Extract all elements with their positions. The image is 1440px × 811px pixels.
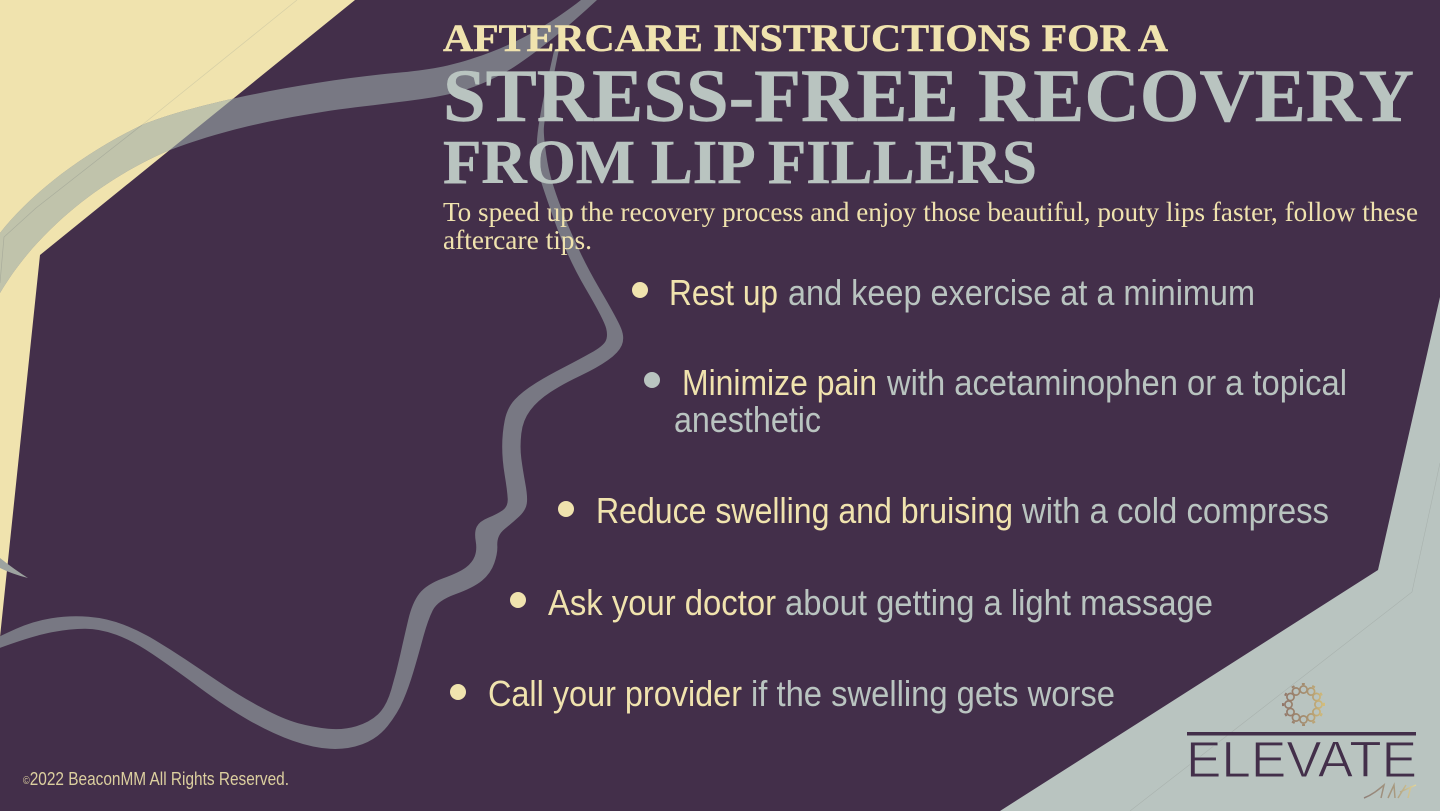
face profile outline xyxy=(0,50,622,748)
logo wordmark: ELEVATE xyxy=(1186,731,1417,788)
tip 2: minimize pain: with acetaminophen or a topical xyxy=(886,362,1347,403)
tip 4: ask your doctor xyxy=(510,582,1213,623)
intro text: To speed up the recovery process and enjoy those beautiful, pouty lips faster, follow these xyxy=(443,197,1418,227)
tip 3: reduce swelling: Reduce swelling and bruising xyxy=(596,490,1013,531)
cream corner shape xyxy=(0,0,355,637)
intro text xyxy=(443,197,1418,255)
copyright: 2022 BeaconMM All Rights Reserved. xyxy=(30,768,289,789)
face neck sliver xyxy=(0,558,28,578)
sage corner shape xyxy=(1000,297,1440,811)
tip 5: call your provider xyxy=(450,673,1115,714)
title line 1: AFTERCARE INSTRUCTIONS FOR A xyxy=(443,17,1168,60)
tip 4: ask your doctor: Ask your doctor xyxy=(548,582,776,623)
intro text: aftercare tips. xyxy=(443,225,592,255)
tip 3: reduce swelling: with a cold compress xyxy=(1021,490,1329,531)
tip 3: reduce swelling xyxy=(558,490,1329,531)
tip list xyxy=(450,272,1347,714)
copyright: © xyxy=(23,775,30,787)
tip 4: ask your doctor: about getting a light massage xyxy=(785,582,1213,623)
tip 1: rest up xyxy=(632,272,1255,313)
logo top bar xyxy=(1187,732,1416,736)
tip 5: call your provider: if the swelling gets worse xyxy=(751,673,1115,714)
logo script mark xyxy=(1364,785,1416,798)
title line 3: FROM LIP FILLERS xyxy=(443,129,1037,197)
face forehead band xyxy=(0,0,597,293)
tip 1: rest up: and keep exercise at a minimum xyxy=(788,272,1255,313)
icon: rosette xyxy=(1283,684,1324,725)
tip 5: call your provider: Call your provider xyxy=(488,673,742,714)
tip 1: rest up: Rest up xyxy=(669,272,778,313)
title xyxy=(443,17,1414,197)
tip 2: minimize pain xyxy=(644,362,1347,440)
tip 2: minimize pain: anesthetic xyxy=(674,399,821,440)
title line 2: STRESS-FREE RECOVERY xyxy=(443,55,1414,138)
tip 2: minimize pain: Minimize pain xyxy=(682,362,877,403)
logo: Elevate xyxy=(1186,684,1417,798)
